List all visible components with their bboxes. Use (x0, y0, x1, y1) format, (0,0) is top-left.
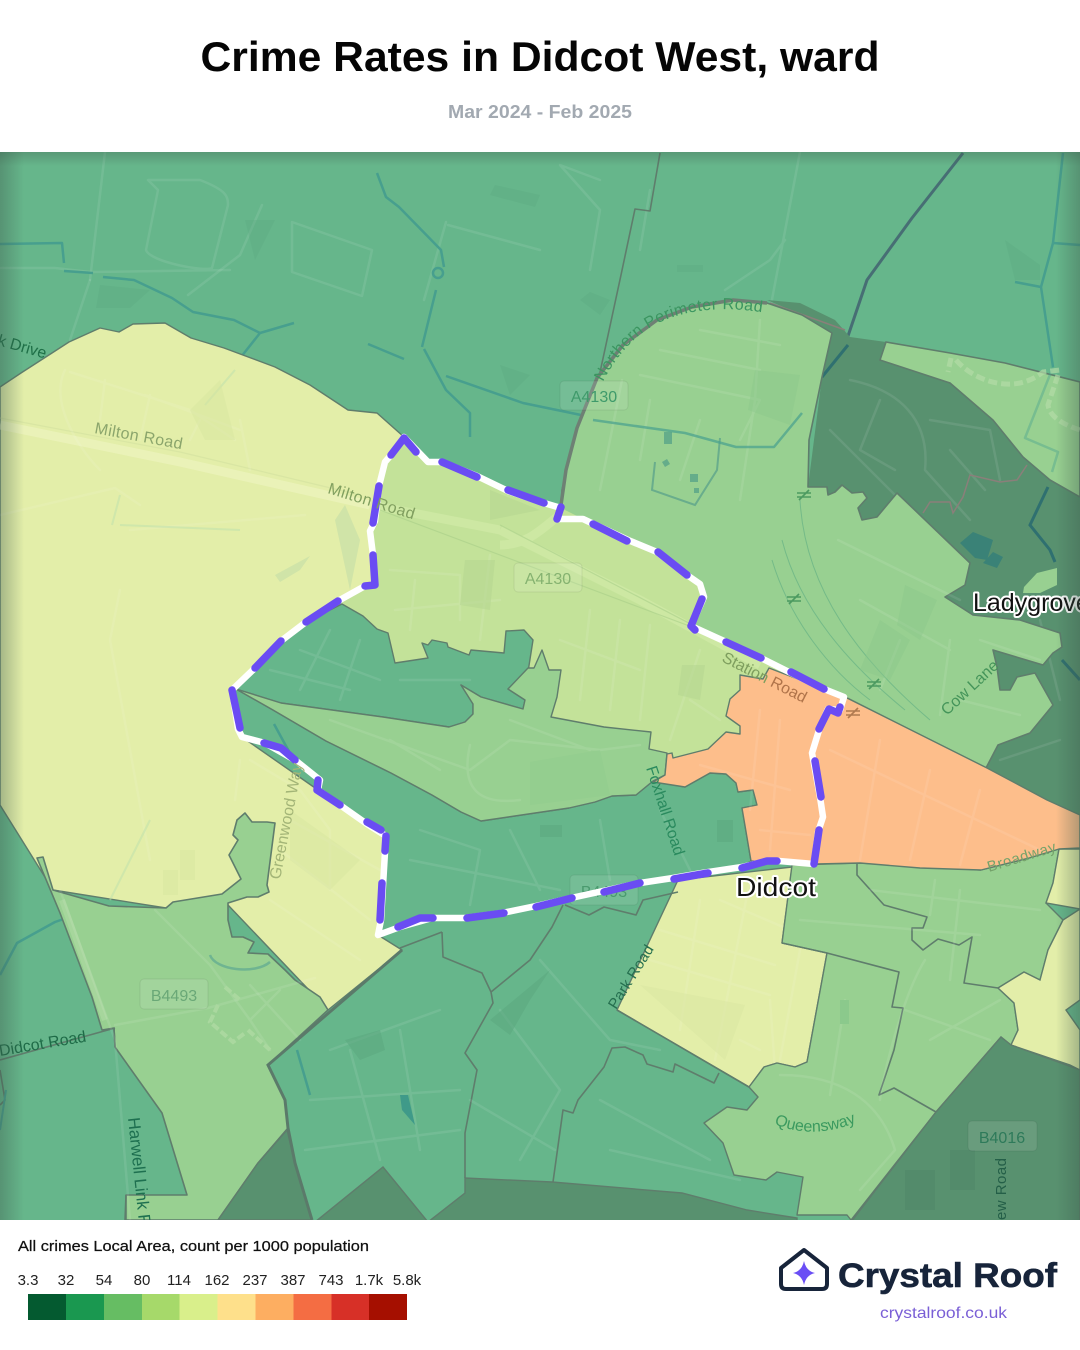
ward boundary: white line (232, 437, 844, 935)
road shield: B4016: B4016 (979, 1130, 1025, 1147)
road shield: A4130 north (560, 381, 628, 410)
map edge vignette (0, 152, 1080, 1220)
ward interior: mid green lower band (236, 690, 756, 906)
region: dark green Ladygrove (767, 300, 1080, 815)
label: Harwell Link Road: Harwell Link Road (124, 1116, 157, 1256)
ward interior: light green centre (236, 650, 667, 821)
label: Broadway: Broadway (985, 839, 1059, 876)
region: light green east of ward (561, 300, 1062, 768)
legend tick labels (18, 1272, 422, 1289)
road labels (0, 298, 1080, 1272)
legend tick labels: 80 (134, 1272, 150, 1289)
region: light green north east strip (880, 342, 1080, 497)
railway station symbols (787, 490, 881, 718)
logo url: crystalroof.co.uk (880, 1305, 1008, 1322)
label: Cow Lane: Cow Lane (938, 657, 1002, 719)
road shield: B4016 (968, 1121, 1037, 1151)
region: yellow far east patches (998, 849, 1080, 1070)
label: ew Road: ew Road (993, 1158, 1010, 1220)
legend tick labels: 114 (167, 1272, 191, 1289)
logo: Crystal Roof (781, 1250, 1058, 1322)
road shield: B4493 west: B4493 (151, 988, 197, 1005)
legend tick labels: 1.7k (355, 1272, 384, 1289)
region: light green south west (37, 813, 328, 1220)
waterways (0, 153, 1080, 975)
south mid green estate borders (268, 892, 749, 1220)
legend tick labels: 387 (280, 1272, 306, 1289)
label: Park Road: Park Road (605, 942, 658, 1012)
label: Greenwood Way: Greenwood Way (267, 762, 306, 881)
ward interior: mid green north west blob (236, 604, 533, 727)
road shield: B4493 ward: B4493 (581, 884, 627, 901)
region: orange town centre (653, 668, 1080, 870)
place label: Didcot: Didcot (736, 872, 817, 902)
label: Northern Perimeter Road: Northern Perimeter Road (594, 298, 762, 381)
legend tick labels: 743 (318, 1272, 344, 1289)
icon: house with star (781, 1250, 827, 1289)
legend tick labels: 3.3 (18, 1272, 38, 1289)
label: Queensway: Queensway (776, 1114, 854, 1132)
label: Milton Road ward: Milton Road (326, 481, 417, 523)
region: yellow south of ward (617, 867, 827, 1087)
logo wordmark: Crystal Roof (838, 1257, 1058, 1295)
label: Milton Road west: Milton Road (93, 420, 184, 453)
title: Crime Rates in Didcot West, ward (200, 33, 880, 80)
road shield: A4130 ward: A4130 (525, 571, 571, 588)
legend tick labels: 5.8k (393, 1272, 422, 1289)
rural roads and fields (0, 152, 801, 341)
label: Foxhall Road: Foxhall Road (642, 764, 687, 858)
legend tick labels: 54 (96, 1272, 112, 1289)
legend tick labels: 237 (242, 1272, 268, 1289)
road shield: B4493 west (140, 979, 208, 1009)
label: Didcot Road: Didcot Road (0, 1029, 87, 1060)
legend tick labels: 162 (204, 1272, 230, 1289)
lower left mid green borders (0, 890, 130, 1220)
road shield: B4493 ward (570, 875, 638, 905)
subtitle: date range: Mar 2024 - Feb 2025 (448, 102, 632, 122)
region: yellow west (0, 323, 404, 1010)
legend title: All crimes Local Area, count per 1000 population (18, 1238, 369, 1255)
legend tick labels: 32 (58, 1272, 74, 1289)
parish boundary lines north (599, 153, 963, 377)
ward interior: lime base (340, 444, 784, 758)
legend colour scale (28, 1294, 407, 1320)
region: dark green south (218, 1037, 1080, 1222)
road shield: A4130 ward (514, 563, 582, 592)
legend (18, 1238, 422, 1320)
region: light green south east (704, 849, 1063, 1220)
ward boundary: purple dashes (232, 438, 840, 927)
label: Station Road: Station Road (719, 649, 809, 707)
road shield: A4130 north: A4130 (571, 389, 617, 406)
